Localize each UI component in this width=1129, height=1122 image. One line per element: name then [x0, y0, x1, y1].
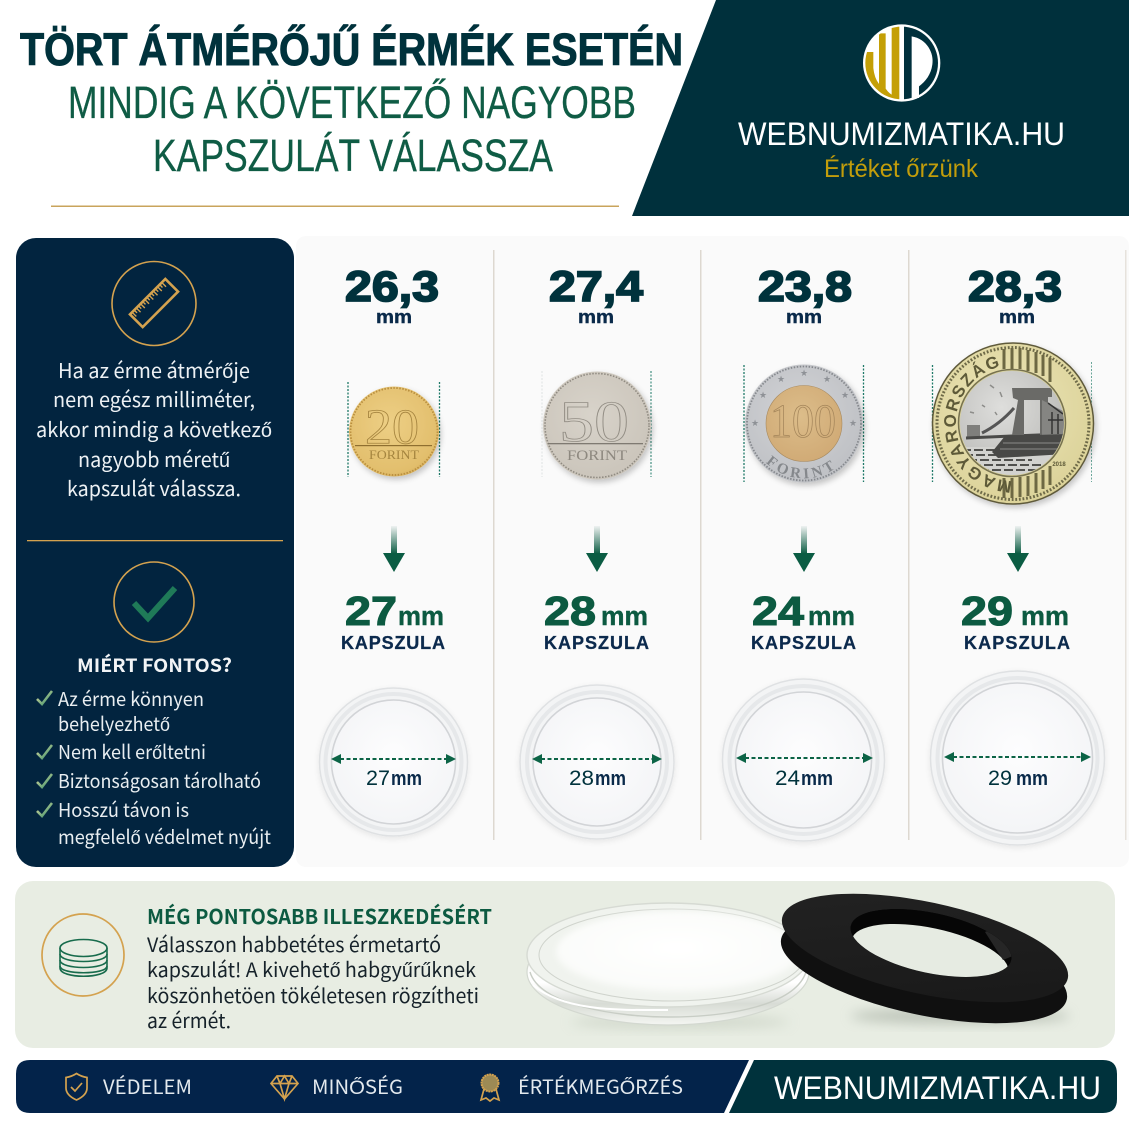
brand name: WEBNUMIZMATIKA.HU	[738, 116, 1065, 152]
capsule size: 24	[752, 588, 804, 634]
benefits list: behelyezhető	[58, 710, 170, 737]
icon: check mark	[114, 562, 194, 642]
capsule: 27 mm: mm	[391, 768, 422, 790]
arrow down	[586, 526, 608, 572]
benefits list: Az érme könnyen	[58, 685, 204, 712]
capsule size	[544, 588, 649, 653]
capsule: 28 mm: mm	[595, 768, 626, 790]
coin: 100 forint: FORINT	[766, 455, 834, 478]
column: 28,3 mm coin	[930, 263, 1106, 848]
benefits list: Nem kell erőltetni	[58, 738, 206, 765]
coin: 100 forint: ★	[823, 374, 831, 384]
capsule size	[341, 588, 445, 653]
capsule size: KAPSZULA	[544, 633, 649, 653]
coin: 100 forint: ★	[751, 418, 759, 428]
capsule: 29 mm	[930, 671, 1104, 845]
coin: 50 forint: 50	[559, 389, 629, 454]
explanation text: akkor mindig a következő	[36, 413, 272, 443]
coin: 20 forint: 20	[365, 398, 419, 454]
icon: ruler	[112, 262, 196, 346]
measured diameter	[968, 263, 1062, 327]
coin: 100 forint: ★	[849, 418, 857, 428]
measured diameter	[549, 263, 643, 327]
coin: 100 forint: ★	[800, 368, 808, 378]
explanation text: nem egész milliméter,	[53, 383, 255, 413]
capsule size: mm	[601, 601, 648, 631]
arrow down	[383, 526, 405, 572]
capsule size: KAPSZULA	[964, 633, 1070, 653]
capsule size	[961, 588, 1070, 653]
benefits list: megfelelő védelmet nyújt	[58, 823, 271, 850]
coin: 100 forint	[743, 364, 868, 488]
measured diameter: mm	[999, 307, 1035, 327]
label: quality: MINŐSÉG	[312, 1071, 403, 1100]
measured diameter	[758, 263, 852, 327]
benefits list: Biztonságosan tárolható	[58, 767, 261, 794]
photo: black foam ring	[780, 894, 1068, 1029]
tip body text: Válasszon habbetétes érmetartó	[147, 929, 441, 958]
measured diameter	[345, 263, 439, 327]
capsule size: 29	[961, 588, 1013, 634]
capsule size: 27	[345, 588, 397, 634]
icon: coin stack	[42, 914, 124, 996]
measured diameter: 28,3	[968, 263, 1062, 311]
capsule: 28 mm: 28	[569, 767, 594, 790]
title line 3: KAPSZULÁT VÁLASSZA	[153, 130, 553, 181]
column: 27,4 mm coin	[520, 263, 674, 839]
heading: why important: MIÉRT FONTOS?	[77, 652, 232, 678]
panel: foam insert tip	[15, 873, 1115, 1048]
icon: rosette	[481, 1074, 499, 1101]
title line 1: TÖRT ÁTMÉRŐJŰ ÉRMÉK ESETÉN	[20, 24, 683, 75]
brand header panel	[632, 0, 1129, 216]
icon: diamond	[271, 1076, 298, 1099]
capsule size: 28	[544, 588, 596, 634]
coin: 100 forint: ★	[777, 374, 785, 384]
arrow down	[1007, 526, 1029, 572]
explanation text: Ha az érme átmérője	[58, 354, 250, 384]
explanation text	[36, 354, 272, 502]
coin: 200 forint: 2018	[1052, 462, 1066, 468]
coin legend: MAGYARORSZÁG	[944, 356, 1011, 493]
label: protection: VÉDELEM	[103, 1071, 192, 1100]
coin: 50 forint: FORINT	[567, 448, 627, 464]
column: 26,3 mm coin	[320, 263, 468, 836]
measured diameter: 23,8	[758, 263, 852, 311]
icon: shield	[66, 1074, 87, 1100]
chain bridge	[966, 384, 1064, 475]
capsule: 24 mm: 24	[775, 767, 800, 790]
capsule size: mm	[1021, 601, 1069, 631]
left panel: rule explanation	[16, 238, 294, 867]
explanation text: nagyobb méretű	[78, 443, 230, 473]
measured diameter: mm	[786, 307, 822, 327]
capsule: 27 mm	[320, 688, 468, 836]
comparison area background	[296, 236, 1129, 867]
measured diameter: mm	[578, 307, 614, 327]
column: 23,8 mm coin	[722, 263, 886, 844]
coin: 50 forint	[542, 371, 651, 480]
tip body text: köszönhetöen tökéletesen rögzítheti	[147, 980, 479, 1009]
capsule size: mm	[398, 601, 444, 631]
logo	[862, 24, 942, 102]
tip body text	[147, 929, 479, 1034]
label: value preservation: ÉRTÉKMEGŐRZÉS	[518, 1071, 683, 1100]
footer brand name: WEBNUMIZMATIKA.HU	[774, 1070, 1101, 1106]
capsule size: mm	[808, 601, 855, 631]
tip body text: az érmét.	[147, 1005, 231, 1034]
capsule size	[751, 588, 856, 653]
capsule size: KAPSZULA	[751, 633, 856, 653]
photo: clear capsule	[527, 903, 809, 1029]
capsule: 29 mm: 29	[988, 767, 1012, 790]
coin: 100 forint: ★	[759, 390, 767, 400]
capsule: 27 mm: 27	[366, 767, 390, 790]
arrow down	[793, 526, 815, 572]
benefits list	[37, 685, 271, 850]
tagline: Értéket őrzünk	[824, 154, 978, 183]
coin bars	[1004, 348, 1050, 498]
capsule size: KAPSZULA	[341, 633, 445, 653]
capsule: 28 mm	[520, 685, 674, 839]
footer bar	[16, 1060, 1117, 1113]
explanation text: kapszulát válassza.	[67, 472, 241, 502]
capsule: 29 mm: mm	[1016, 768, 1048, 790]
coin: 20 forint: FORINT	[369, 447, 419, 462]
measured diameter: 27,4	[549, 263, 643, 311]
coin: 100 forint: 100	[770, 395, 836, 448]
coin: 200 forint	[931, 342, 1099, 510]
coin: 100 forint: ★	[841, 390, 849, 400]
benefits list: Hosszú távon is	[58, 796, 189, 823]
capsule: 24 mm	[722, 679, 884, 841]
capsule: 24 mm: mm	[801, 768, 833, 790]
title line 2: MINDIG A KÖVETKEZŐ NAGYOBB	[68, 77, 636, 128]
title block	[20, 24, 683, 181]
measured diameter: 26,3	[345, 263, 439, 311]
coin: 20 forint	[348, 382, 440, 477]
tip heading: MÉG PONTOSABB ILLESZKEDÉSÉRT	[147, 900, 492, 930]
measured diameter: mm	[376, 307, 412, 327]
tip body text: kapszulát! A kivehető habgyűrűknek	[147, 954, 476, 983]
